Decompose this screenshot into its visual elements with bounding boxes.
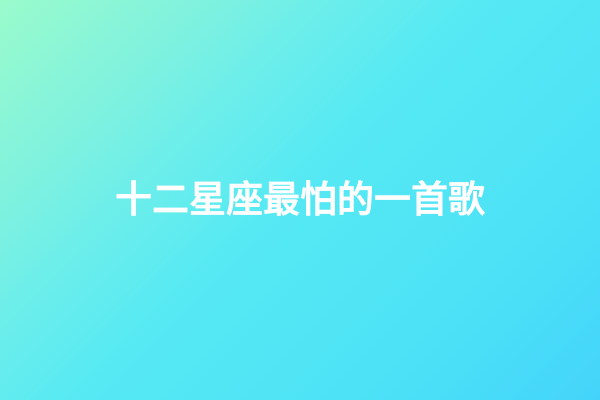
title: 十二星座最怕的一首歌 [115,179,485,220]
